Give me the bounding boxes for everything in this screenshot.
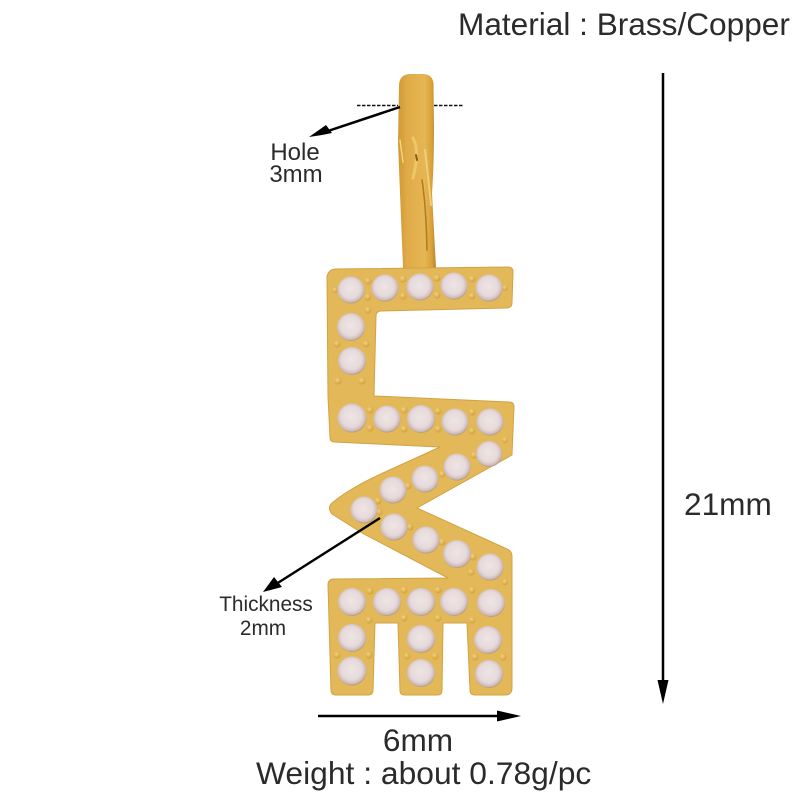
- gold beads: [332, 274, 508, 660]
- bail highlights: [400, 138, 431, 250]
- pendant charm: [327, 74, 514, 695]
- height label: 21mm: [684, 486, 772, 522]
- width label: 6mm: [383, 722, 453, 758]
- hole arrow: [309, 107, 400, 137]
- thickness label: [219, 593, 313, 640]
- bail loop: [398, 74, 436, 268]
- thickness arrow: [263, 518, 380, 592]
- letter body: [327, 267, 514, 695]
- thickness label: 2mm: [240, 617, 286, 640]
- hole label: 3mm: [269, 161, 323, 188]
- width arrow: [318, 710, 521, 722]
- zircon stones: [337, 272, 505, 688]
- thickness label: Thickness: [219, 593, 313, 616]
- height arrow: [658, 73, 668, 704]
- weight label: Weight : about 0.78g/pc: [256, 755, 591, 791]
- material label: Material : Brass/Copper: [458, 6, 790, 42]
- hole label: Hole: [270, 139, 320, 166]
- hole dashed guide: [357, 104, 464, 106]
- hole label: [269, 139, 323, 188]
